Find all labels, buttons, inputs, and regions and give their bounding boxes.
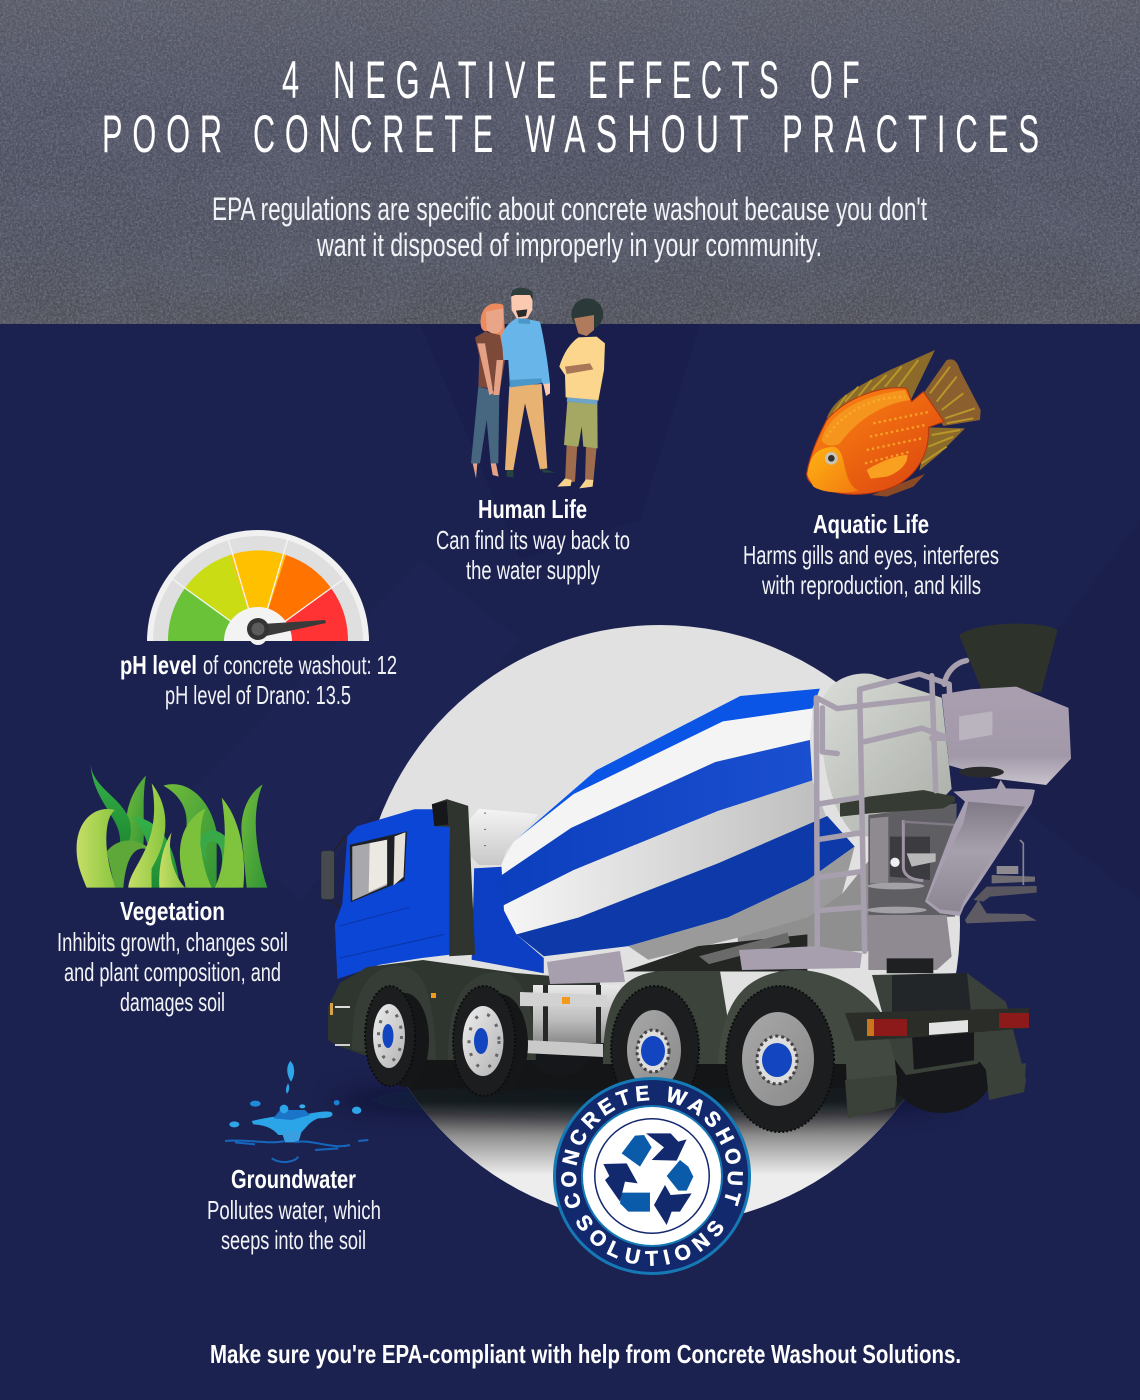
human life text <box>436 494 630 585</box>
platform <box>840 790 955 817</box>
lower truck: chassis in page coordinates <box>328 946 1029 1132</box>
fins <box>827 350 981 497</box>
groundwater text: Groundwater <box>231 1164 356 1194</box>
icon: people <box>471 288 605 488</box>
mixer back disc <box>822 673 952 836</box>
logo ring text <box>561 1086 743 1266</box>
wheel 3 <box>611 986 699 1112</box>
logo ring text: CONCRETE WASHOUT <box>561 1086 743 1208</box>
logo ring text: SOLUTIONS <box>576 1215 724 1266</box>
exhaust stack <box>432 799 475 956</box>
struts under drum <box>623 933 807 972</box>
title: CONCRETE <box>253 105 503 164</box>
icon: water splash <box>225 1061 368 1162</box>
human life text: the water supply <box>466 555 600 585</box>
subtitle <box>212 191 927 263</box>
recycling arrows <box>603 1133 693 1225</box>
subtitle: want it disposed of improperly in your community. <box>316 227 822 263</box>
ring flanges <box>868 883 924 889</box>
title <box>102 51 1049 164</box>
title: WASHOUT <box>525 105 759 164</box>
human life text: Human Life <box>478 494 587 524</box>
human life text: Can find its way back to <box>436 525 630 555</box>
grey disc behind truck <box>360 625 960 1225</box>
title: OF <box>810 51 869 110</box>
aquatic life text: with reproduction, and kills <box>761 570 981 600</box>
icon: pH gauge <box>147 530 369 645</box>
logo badge: Concrete Washout Solutions <box>553 1077 751 1275</box>
fish head <box>807 447 858 493</box>
truck cab <box>321 809 450 979</box>
groundwater text <box>207 1164 381 1255</box>
wheel 2 <box>453 986 528 1096</box>
rear body block <box>872 973 1026 1100</box>
pH text: pH level of Drano: 13.5 <box>165 680 351 710</box>
machinery backing <box>868 803 957 917</box>
aquatic life text: Harms gills and eyes, interferes <box>743 540 999 570</box>
scales <box>827 397 930 463</box>
hopper box <box>942 687 1071 785</box>
fish body <box>807 388 944 494</box>
man with blue sweater <box>502 288 556 477</box>
rear hidden tyre <box>892 1033 992 1113</box>
pillar <box>870 817 888 883</box>
title: NEGATIVE <box>333 51 566 110</box>
footer call to action: Make sure you're EPA-compliant with help from Concrete Washout Solutions. <box>210 1339 961 1369</box>
discharge chute <box>925 780 1035 916</box>
vegetation text: damages soil <box>120 987 225 1017</box>
upper truck: drum, cab and stack <box>321 673 952 979</box>
rear bumper and lights <box>845 1008 1029 1041</box>
title: 4 <box>282 51 309 110</box>
icon: fish <box>807 350 981 497</box>
icon: grass <box>77 765 267 888</box>
person with crossed arms <box>557 298 605 488</box>
rear fender 4 <box>718 970 897 1118</box>
title: EFFECTS <box>588 51 788 110</box>
upper scale patch <box>822 390 910 446</box>
ladder and railings <box>816 624 1071 961</box>
mixer drum with stripes <box>501 689 872 960</box>
woman <box>471 303 506 478</box>
vegetation text: and plant composition, and <box>64 957 281 987</box>
pH text: pH level <box>120 650 197 680</box>
groundwater text: Pollutes water, which <box>207 1195 381 1225</box>
back tyre of tandem 2 <box>530 1036 590 1076</box>
eye <box>825 452 838 465</box>
aquatic life text <box>743 509 999 600</box>
hopper funnel <box>959 624 1058 693</box>
white water tank <box>464 809 539 865</box>
rear forks <box>965 840 1037 923</box>
concrete mixer truck <box>321 624 1071 1132</box>
rear mud flaps <box>845 1030 1026 1118</box>
pH text: of concrete washout: 12 <box>203 650 397 680</box>
underbody <box>410 1030 900 1090</box>
rear fender 3 <box>603 971 735 1064</box>
pectoral fin <box>867 455 907 479</box>
blue frame <box>472 867 544 973</box>
wheel 4 <box>726 986 834 1132</box>
header band: concrete texture <box>0 0 1140 324</box>
pedestal <box>868 915 952 970</box>
vegetation text <box>57 896 288 1017</box>
front lights <box>330 993 436 1046</box>
groundwater text: seeps into the soil <box>221 1225 366 1255</box>
truck ground shadow <box>346 1085 923 1214</box>
title: POOR <box>102 105 232 164</box>
vegetation text: Vegetation <box>120 896 225 926</box>
front fenders <box>352 966 436 1060</box>
lilac side fenders <box>547 946 862 984</box>
fuel tank and side rails <box>520 985 620 1057</box>
rear mechanism <box>840 780 1037 973</box>
wheel 1 <box>365 986 429 1087</box>
main chassis <box>328 960 600 1060</box>
pH text <box>120 650 397 710</box>
aquatic life text: Aquatic Life <box>813 509 929 539</box>
valve block <box>907 853 936 867</box>
vegetation text: Inhibits growth, changes soil <box>57 927 288 957</box>
